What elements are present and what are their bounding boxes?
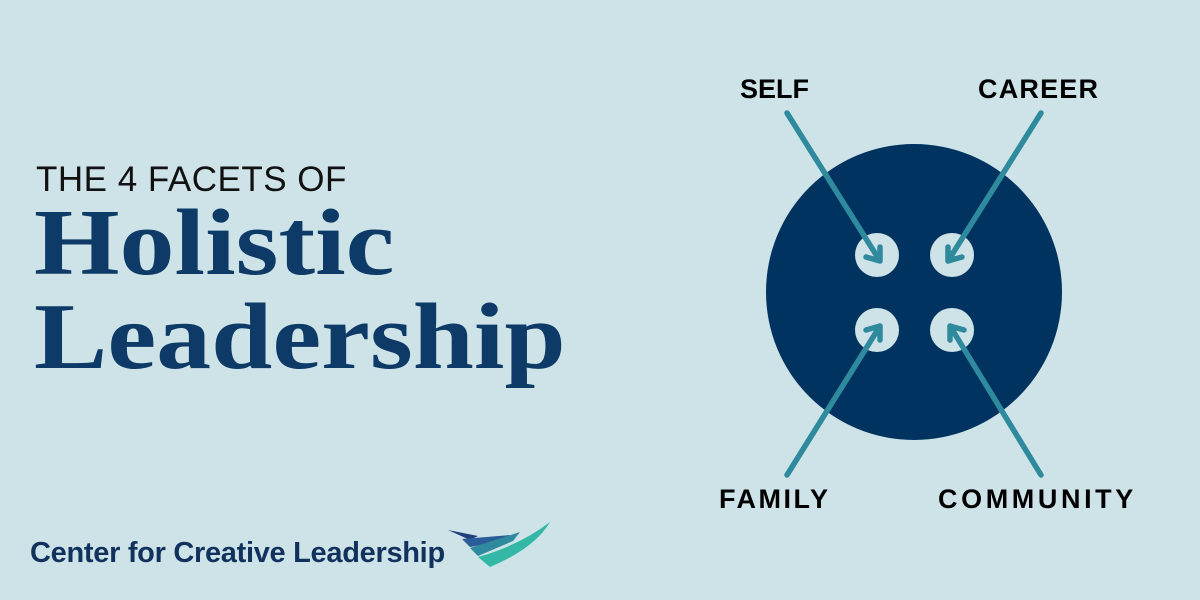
big circle [766, 144, 1062, 440]
label: CAREER: CAREER [978, 74, 1099, 104]
arrows [787, 113, 1041, 475]
label: COMMUNITY: COMMUNITY [938, 484, 1137, 514]
title: Leadership: Leadership [34, 285, 566, 389]
label: FAMILY: FAMILY [719, 484, 831, 514]
label: SELF: SELF [740, 74, 809, 104]
logo: Center for Creative Leadership: Center for Creative Leadership [30, 537, 445, 569]
title: Holistic: Holistic [34, 191, 394, 295]
icon: logo swoosh [448, 522, 550, 567]
title: small heading: THE 4 FACETS OF [36, 160, 347, 199]
small holes [855, 233, 974, 352]
